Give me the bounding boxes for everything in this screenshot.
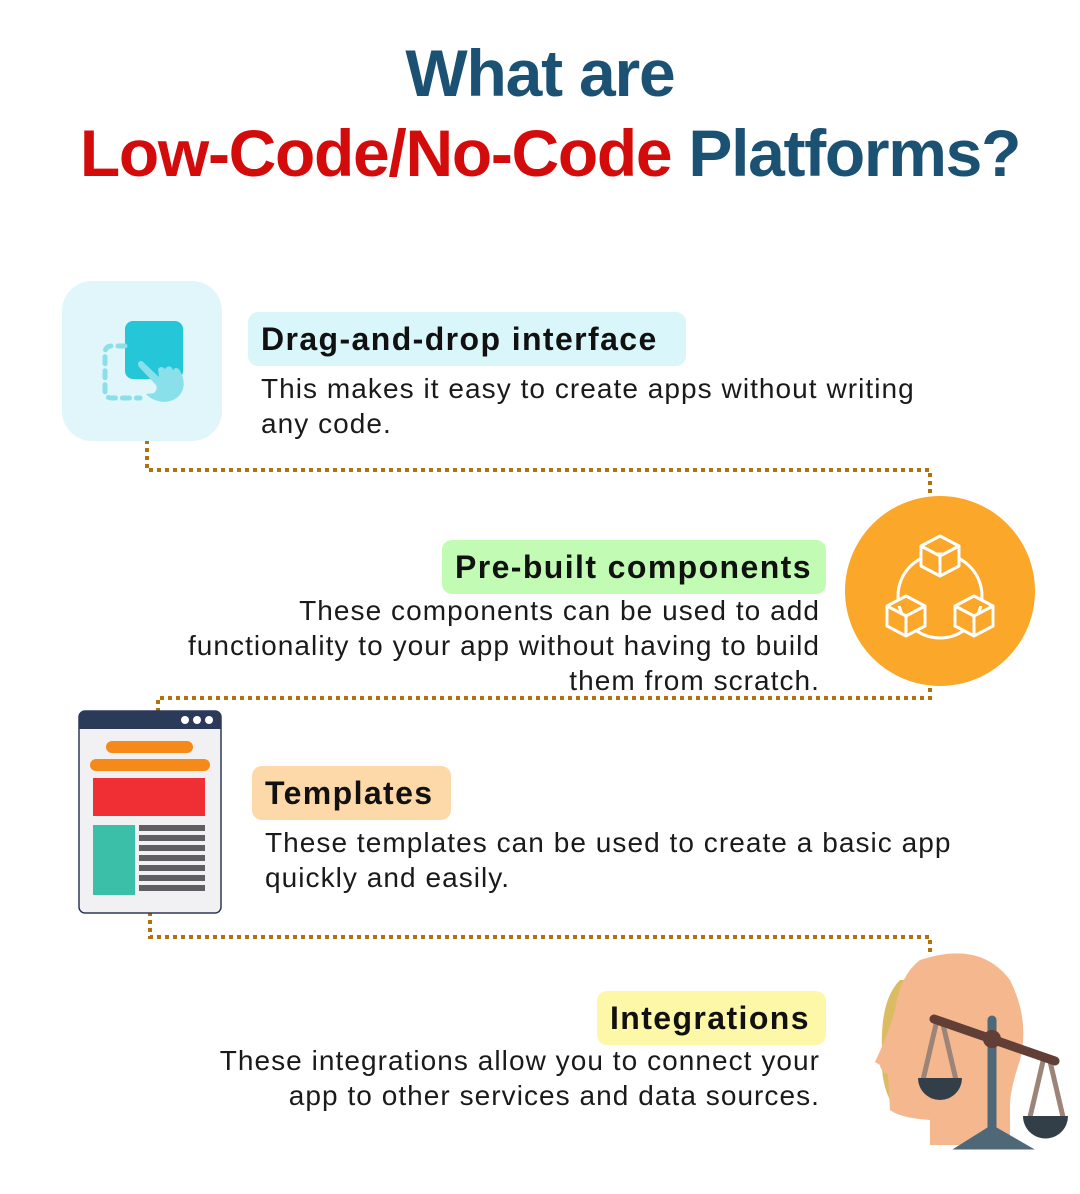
title: Low-Code/No-Code Platforms? [80, 116, 1020, 190]
heading: integrations: Integrations [610, 1000, 810, 1036]
text: drag-and-drop [261, 373, 915, 439]
heading: pre-built [442, 540, 826, 594]
title: What are [405, 36, 675, 110]
text: drag-and-drop: any code. [261, 408, 392, 439]
heading: templates [252, 766, 451, 820]
heading: templates: Templates [265, 775, 434, 811]
text: pre-built: functionality to your app without having to build [188, 630, 820, 661]
text: templates: quickly and easily. [265, 862, 510, 893]
heading: drag-and-drop [248, 312, 686, 366]
icon: components circle [845, 496, 1035, 686]
text: pre-built [188, 595, 820, 696]
icon: head with scales [875, 953, 1068, 1150]
text: templates: These templates can be used to create a basic app [265, 827, 952, 858]
text: pre-built: These components can be used to add [299, 595, 820, 626]
heading: integrations [597, 991, 826, 1045]
text: templates [265, 827, 952, 893]
heading: pre-built: Pre-built components [455, 549, 812, 585]
heading: drag-and-drop: Drag-and-drop interface [261, 321, 658, 357]
icon: drag and drop [62, 281, 222, 441]
text: drag-and-drop: This makes it easy to create apps without writing [261, 373, 915, 404]
icon: template [78, 710, 222, 914]
text: integrations: app to other services and data sources. [289, 1080, 820, 1111]
text: integrations: These integrations allow you to connect your [220, 1045, 820, 1076]
title [80, 36, 1020, 190]
text: pre-built: them from scratch. [569, 665, 820, 696]
text: integrations [220, 1045, 820, 1111]
